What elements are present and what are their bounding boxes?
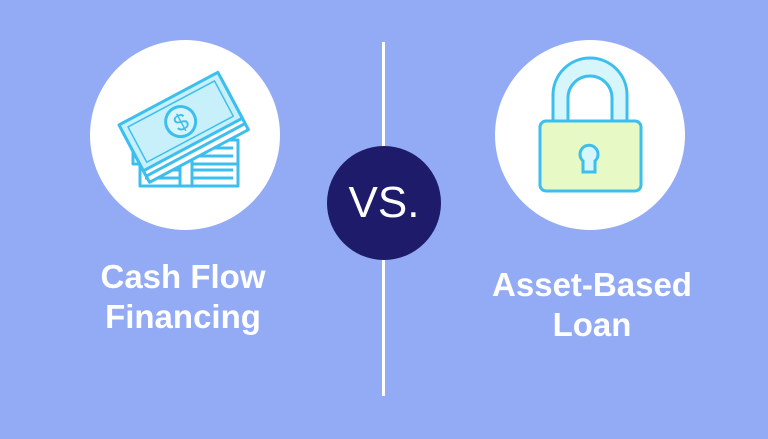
heading: Cash Flow Financing: Cash Flow	[100, 258, 266, 295]
panel: right icon circle	[495, 40, 685, 230]
icon: money stack	[117, 70, 250, 188]
heading: Cash Flow Financing	[100, 258, 266, 335]
heading: Asset-Based Loan	[492, 266, 692, 343]
VS badge: VS.	[349, 178, 419, 227]
icon: padlock	[538, 56, 642, 192]
heading: Cash Flow Financing: Financing	[105, 298, 261, 335]
heading: Asset-Based Loan: Asset-Based	[492, 266, 692, 303]
panel: left icon circle	[90, 40, 280, 230]
heading: Asset-Based Loan: Loan	[553, 306, 631, 343]
VS badge	[327, 146, 441, 260]
divider line	[382, 42, 385, 396]
icon: money stack: $	[169, 108, 194, 138]
